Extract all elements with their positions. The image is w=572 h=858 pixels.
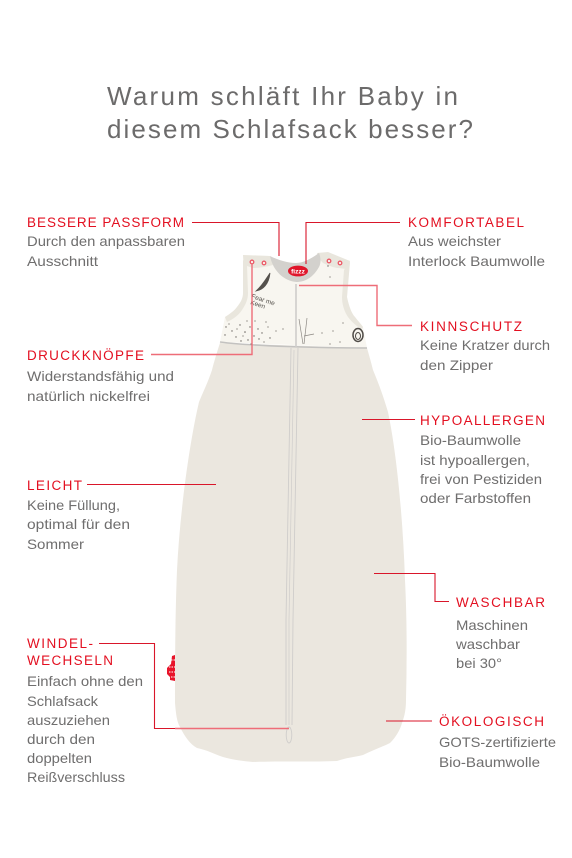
callout: Leicht: LEICHT [27, 478, 82, 493]
spiral print [353, 328, 363, 342]
red collar logo: fizzz [291, 268, 306, 276]
print text: Keen [249, 299, 266, 311]
callout: Leicht: optimal für den [27, 517, 130, 532]
callout: Komfortabel: Aus weichster [408, 234, 501, 249]
callout: Druckknöpfe: natürlich nickelfrei [27, 389, 150, 404]
callout: Windelwechseln: WECHSELN [27, 653, 113, 668]
red collar logo [288, 266, 308, 276]
callout: Komfortabel: Interlock Baumwolle [408, 254, 545, 269]
feather print [256, 273, 270, 291]
callout: Hypoallergen: Bio-Baumwolle [420, 433, 521, 448]
print text: Fear me [250, 293, 276, 307]
callout: Ökologisch: GOTS-zertifizierte [439, 735, 556, 750]
callout: Hypoallergen: HYPOALLERGEN [420, 413, 545, 428]
zipper [286, 284, 298, 743]
armhole trims [225, 260, 248, 322]
sleeping bag illustration [167, 252, 407, 762]
bag body [175, 343, 407, 762]
side logo [167, 655, 175, 681]
callout: Bessere Passform [27, 215, 279, 269]
callout: Windelwechseln: durch den [27, 732, 95, 747]
callout: Leicht [27, 478, 216, 552]
callout: Druckknöpfe: DRUCKKNÖPFE [27, 348, 144, 363]
callout: Windelwechseln: Einfach ohne den [27, 674, 143, 689]
callout: Leicht: Keine Füllung, [27, 498, 120, 513]
callout: Waschbar: bei 30° [456, 656, 502, 671]
callout: Windelwechseln: auszuziehen [27, 713, 110, 728]
snap buttons [250, 259, 342, 265]
callout: Hypoallergen: ist hypoallergen, [420, 453, 530, 468]
callout: Bessere Passform: BESSERE PASSFORM [27, 215, 184, 230]
callout: Waschbar: waschbar [455, 637, 520, 652]
collar [270, 253, 320, 282]
callout: Bessere Passform: Durch den anpassbaren [27, 234, 185, 249]
callout: Kinnschutz: den Zipper [420, 358, 493, 373]
callout: Waschbar [374, 574, 545, 671]
callout: Druckknöpfe: Widerstandsfähig und [27, 369, 174, 384]
callout: Ökologisch: Bio-Baumwolle [439, 755, 540, 770]
callout: Waschbar: Maschinen [456, 618, 528, 633]
callout: Windelwechseln: WINDEL- [27, 636, 93, 651]
callout: Komfortabel [306, 215, 545, 269]
callout: Hypoallergen [362, 413, 545, 506]
callout: Hypoallergen: frei von Pestiziden [420, 472, 542, 487]
title [107, 81, 473, 144]
callout: Kinnschutz: Keine Kratzer durch [420, 338, 550, 353]
callout: Kinnschutz [299, 286, 550, 373]
branch print [299, 318, 314, 344]
callout: Leicht: Sommer [27, 537, 84, 552]
callout: Windelwechseln: Schlafsack [27, 694, 98, 709]
left shoulder trim [243, 255, 273, 268]
callout: Waschbar: WASCHBAR [456, 595, 545, 610]
callout: Hypoallergen: oder Farbstoffen [420, 491, 531, 506]
callout: Kinnschutz: KINNSCHUTZ [420, 319, 522, 334]
waist seam [220, 342, 367, 348]
title: diesem Schlafsack besser? [107, 114, 473, 144]
torso [220, 253, 367, 348]
title: Warum schläft Ihr Baby in [107, 81, 458, 111]
callout: Druckknöpfe [27, 263, 252, 404]
print speckles [224, 265, 344, 345]
callout: Komfortabel: KOMFORTABEL [408, 215, 524, 230]
callout: Windelwechseln [27, 636, 289, 785]
callout: Bessere Passform: Ausschnitt [27, 254, 98, 269]
callout: Windelwechseln: doppelten [27, 751, 92, 766]
callout: Ökologisch [386, 714, 556, 770]
callout: Ökologisch: ÖKOLOGISCH [439, 714, 544, 729]
right shoulder trim [317, 252, 350, 269]
callout: Windelwechseln: Reißverschluss [27, 770, 125, 785]
